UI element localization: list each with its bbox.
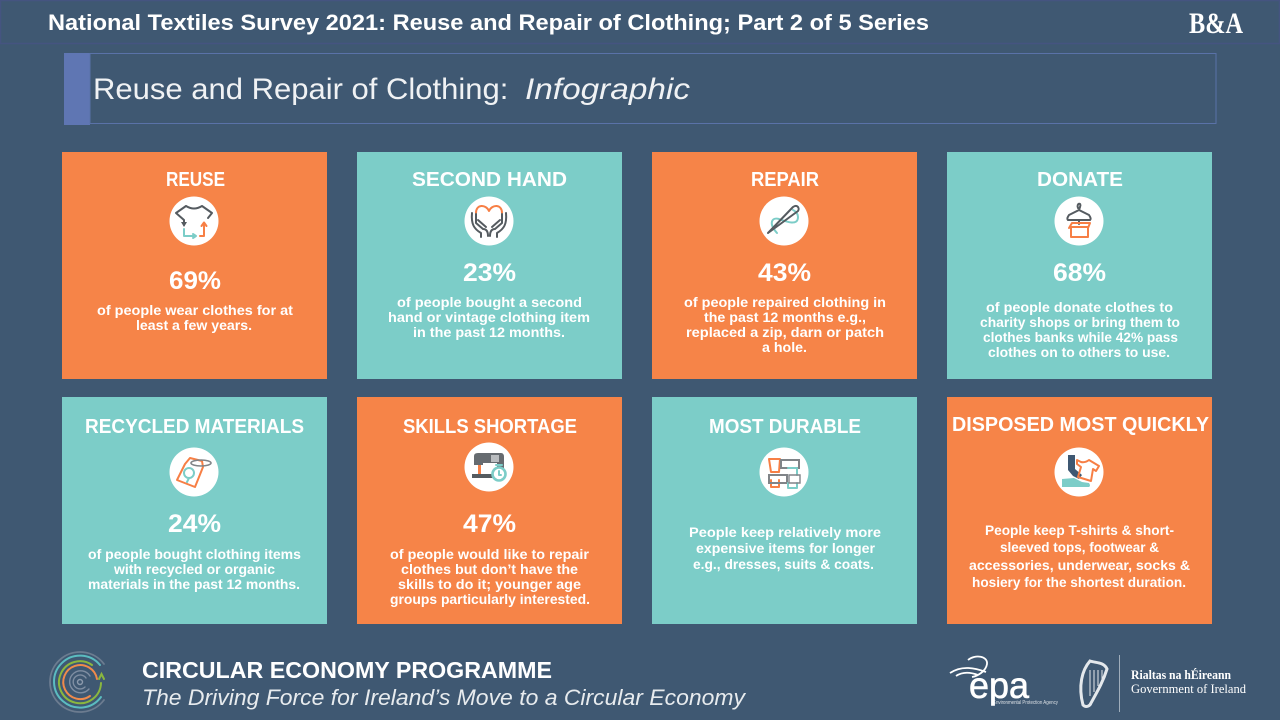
icon: t-shirt with reuse arrows (170, 196, 218, 246)
heading: most durable: MOST DURABLE (709, 416, 861, 438)
text: donate description: of people donate clothes to (986, 300, 1173, 315)
footer heading: CIRCULAR ECONOMY PROGRAMME (142, 657, 552, 683)
text: second hand description (388, 295, 590, 340)
text: recycled materials description: materials in the past 12 months. (88, 577, 300, 592)
logo: B&A: B&A (1189, 7, 1243, 40)
text: second hand description: hand or vintage clothing item (388, 310, 590, 325)
icon: clothing tag with leaf (170, 448, 218, 496)
text: skills shortage description: clothes but don’t have the (401, 562, 579, 577)
stat: 68%: 68% (1053, 259, 1106, 287)
text: skills shortage description: of people would like to repair (390, 547, 590, 562)
icon: circular economy logo (50, 652, 104, 712)
footer tagline: The Driving Force for Ireland’s Move to a Circular Economy (142, 685, 747, 710)
heading: second hand: SECOND HAND (412, 169, 567, 191)
logo text: Government of Ireland: Rialtas na hÉireann (1131, 668, 1231, 682)
heading: recycled materials: RECYCLED MATERIALS (85, 416, 304, 438)
text: donate description: clothes on to others to use. (988, 345, 1170, 360)
text: reuse description (97, 303, 294, 333)
icon: clothes on hanger above donation box (1054, 196, 1104, 246)
logo: EPA (950, 657, 1058, 706)
heading: reuse: REUSE (166, 169, 225, 191)
panel: disposed most quickly (947, 397, 1212, 624)
section heading: Reuse and Repair of Clothing: (93, 73, 517, 106)
text: donate description: clothes banks while 42% pass (983, 330, 1178, 345)
text: disposed most quickly description: sleeved tops, footwear & (1000, 540, 1159, 555)
text: disposed most quickly description: hosiery for the shortest duration. (972, 575, 1186, 590)
stat: 69%: 69% (169, 267, 221, 295)
text: donate description: charity shops or bring them to (980, 315, 1180, 330)
text: repair description: a hole. (762, 340, 807, 355)
text: donate description (980, 300, 1180, 360)
panel: second hand (357, 152, 622, 379)
icon: sock, t-shirt and shoe (1054, 448, 1104, 496)
header bar (0, 0, 1280, 44)
panel: reuse (62, 152, 327, 379)
text: disposed most quickly description: People keep T-shirts & short- (985, 523, 1174, 538)
text: second hand description: of people bought a second (397, 295, 582, 310)
panel: skills shortage (357, 397, 622, 624)
text: reuse description: of people wear clothes for at (97, 303, 294, 318)
icon: hands holding heart (464, 196, 514, 246)
text: skills shortage description: skills to do it; younger age (398, 577, 582, 592)
text: most durable description: expensive items for longer (696, 541, 876, 556)
stat: 23%: 23% (463, 259, 516, 287)
text: repair description: the past 12 months e.g., (704, 310, 866, 325)
logo text: Government of Ireland: Government of Ireland (1131, 682, 1247, 696)
text: skills shortage description: groups particularly interested. (390, 592, 590, 607)
text: recycled materials description: with recycled or organic (113, 562, 276, 577)
text: most durable description: e.g., dresses, suits & coats. (693, 557, 874, 572)
divider (1119, 655, 1120, 712)
panel: most durable (652, 397, 917, 624)
logo: EPA: epa (969, 665, 1029, 706)
text: repair description: replaced a zip, darn or patch (686, 325, 884, 340)
text: disposed most quickly description: accessories, underwear, socks & (969, 558, 1190, 573)
panel: repair (652, 152, 917, 379)
text: recycled materials description: of people bought clothing items (88, 547, 301, 562)
panel: donate (947, 152, 1212, 379)
text: repair description: of people repaired clothing in (684, 295, 886, 310)
icon: four interlocked hands (760, 448, 808, 496)
heading: disposed most quickly: DISPOSED MOST QUICKLY (952, 414, 1210, 436)
text: most durable description (689, 525, 882, 572)
text: disposed most quickly description (969, 523, 1190, 590)
text: most durable description: People keep relatively more (689, 525, 882, 540)
heading: repair: REPAIR (751, 169, 820, 191)
heading: donate: DONATE (1037, 169, 1123, 191)
icon: needle and thread (760, 196, 808, 246)
stat: 47%: 47% (463, 510, 516, 538)
logo: EPA: Environmental Protection Agency (993, 700, 1058, 706)
section heading panel (64, 53, 1216, 125)
panel: recycled materials (62, 397, 327, 624)
title: National Textiles Survey 2021: Reuse and Repair of Clothing; Part 2 of 5 Series (48, 10, 929, 35)
text: reuse description: least a few years. (136, 318, 252, 333)
text: skills shortage description (390, 547, 590, 607)
heading: skills shortage: SKILLS SHORTAGE (403, 416, 577, 438)
logo: harp (1081, 661, 1107, 706)
text: recycled materials description (88, 547, 301, 592)
stat: 24%: 24% (168, 510, 221, 538)
section heading: Infographic (525, 73, 690, 106)
logo text: Government of Ireland (1131, 668, 1247, 696)
text: repair description (684, 295, 886, 355)
stat: 43%: 43% (758, 259, 811, 287)
text: second hand description: in the past 12 months. (413, 325, 565, 340)
icon: sewing machine and stopwatch (464, 442, 514, 492)
